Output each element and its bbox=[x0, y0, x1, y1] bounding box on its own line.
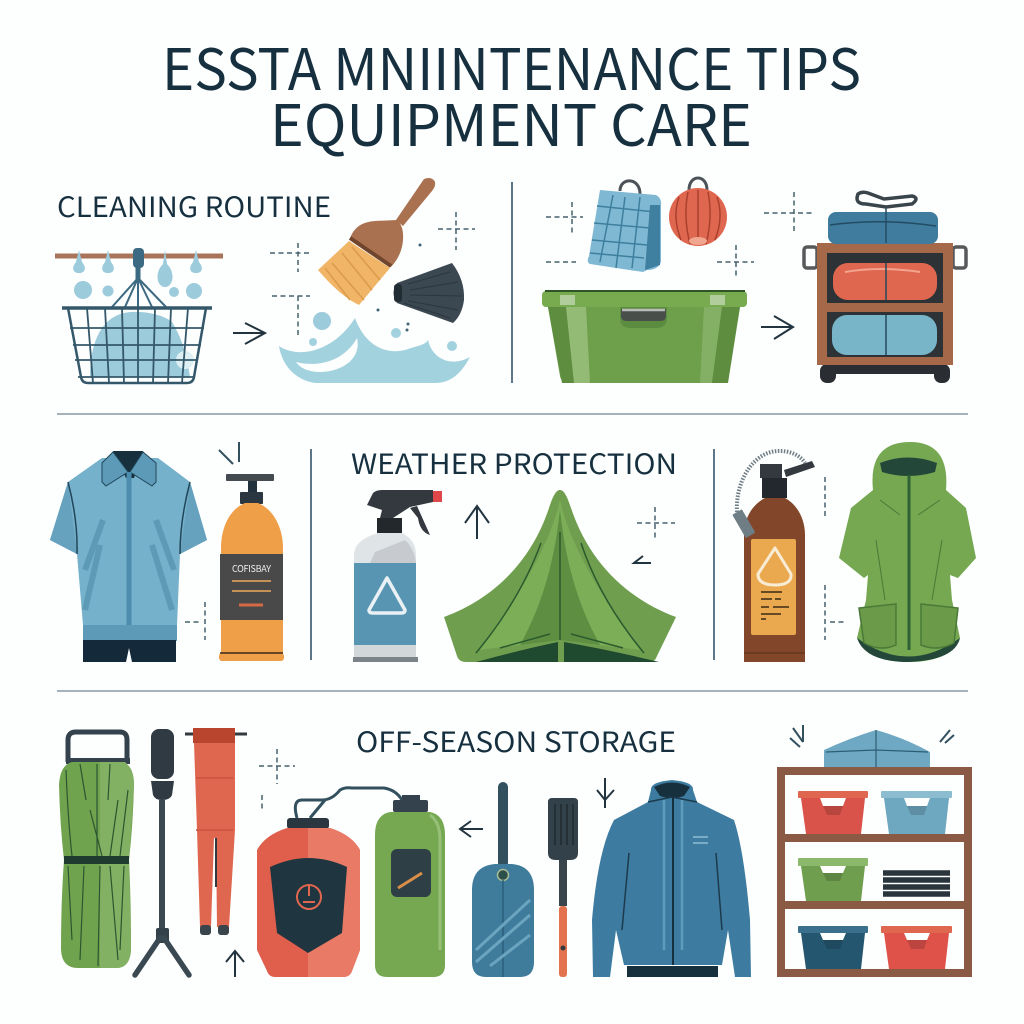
icon: storage cart bbox=[804, 192, 966, 383]
icon: green tent bbox=[444, 490, 676, 662]
icon: blue shirt bbox=[50, 451, 207, 662]
icon: spatula tool bbox=[548, 798, 578, 977]
icon: blue tag bbox=[472, 782, 534, 977]
heading: off-season storage: OFF-SEASON STORAGE bbox=[356, 721, 676, 761]
arrow bbox=[460, 821, 483, 837]
icon: red round pouch bbox=[669, 178, 727, 246]
icon: tripod stand bbox=[135, 729, 189, 975]
icon: connected tube bbox=[295, 788, 402, 818]
arrow bbox=[761, 316, 793, 339]
arrow bbox=[465, 506, 489, 539]
icon: brown spray bottle bbox=[732, 451, 815, 662]
title: ESSTA MNIINTENANCE TIPS bbox=[162, 25, 861, 107]
icon: rolled green sleeping mat bbox=[59, 732, 134, 968]
arrow bbox=[634, 556, 651, 563]
icon: storage shelf bbox=[777, 730, 972, 977]
title: EQUIPMENT CARE bbox=[270, 81, 752, 163]
icon: green storage bin bbox=[542, 291, 747, 383]
icon: blue jacket bbox=[592, 780, 751, 977]
icon: orange bottle: COFISBAY bbox=[232, 562, 271, 575]
icon: laundry basket bbox=[55, 248, 223, 383]
icon: red fuel canister bbox=[257, 818, 360, 977]
icon: orange bottle bbox=[219, 474, 284, 661]
icon: brush bbox=[318, 178, 435, 305]
arrow bbox=[233, 323, 265, 344]
icon: green canister bbox=[375, 795, 445, 977]
icon: black brush head bbox=[394, 263, 464, 323]
icon: blue mesh pouch bbox=[588, 181, 661, 272]
icon: green hooded jacket bbox=[839, 442, 976, 662]
heading: weather protection: WEATHER PROTECTION bbox=[351, 443, 677, 483]
arrow bbox=[226, 951, 244, 977]
icon: red trousers bbox=[185, 728, 247, 935]
arrow bbox=[597, 778, 614, 808]
heading: cleaning routine: CLEANING ROUTINE bbox=[57, 186, 331, 226]
icon: water splash bbox=[279, 244, 470, 383]
title bbox=[162, 25, 861, 163]
icon: spray bottle bbox=[353, 490, 442, 662]
